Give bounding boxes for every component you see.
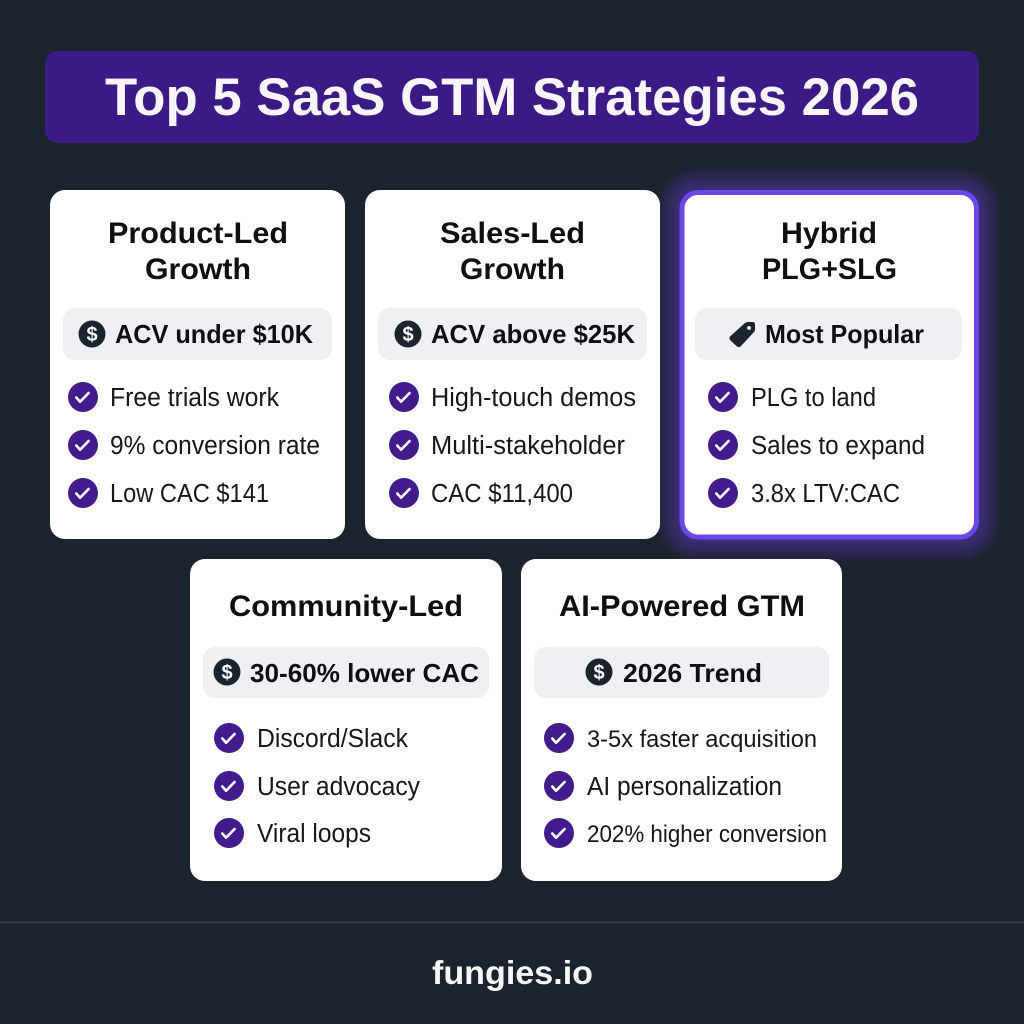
item: Viral loops xyxy=(214,818,371,848)
badge: ACV under $10K xyxy=(63,308,332,360)
item: Low CAC $141 xyxy=(68,478,269,508)
panel: Hybrid PLG+SLG (highlighted) xyxy=(682,192,976,537)
item: 3.8x LTV:CAC xyxy=(708,478,900,508)
title: Top 5 SaaS GTM Strategies 2026 xyxy=(105,68,919,127)
badge: 2026 Trend: 2026 Trend xyxy=(623,658,762,688)
badge: 30-60% lower CAC: $ xyxy=(221,662,233,684)
item: PLG to land: PLG to land xyxy=(751,384,876,412)
item: High-touch demos: High-touch demos xyxy=(431,384,636,412)
heading: Hybrid xyxy=(781,217,877,250)
item: CAC $11,400: CAC $11,400 xyxy=(431,480,573,508)
badge: 2026 Trend xyxy=(534,647,829,698)
item: Free trials work: Free trials work xyxy=(110,384,279,412)
badge: Most Popular xyxy=(695,308,962,360)
item: 3.8x LTV:CAC: 3.8x LTV:CAC xyxy=(751,480,900,508)
heading xyxy=(108,217,288,286)
heading: Product-Led xyxy=(108,217,288,250)
badge: ACV above $25K xyxy=(378,308,647,360)
item: 9% conversion rate: 9% conversion rate xyxy=(110,432,320,460)
badge: 2026 Trend: $ xyxy=(593,662,605,684)
heading xyxy=(762,217,897,286)
icon: price tag xyxy=(729,322,755,347)
heading: AI-Powered GTM xyxy=(559,590,805,623)
badge: ACV above $25K: $ xyxy=(402,324,414,346)
item: 202% higher conversion: 202% higher conversion xyxy=(587,821,827,848)
heading: Growth xyxy=(145,253,251,286)
badge: 30-60% lower CAC xyxy=(203,647,489,698)
item: Viral loops: Viral loops xyxy=(257,820,371,848)
item: Discord/Slack: Discord/Slack xyxy=(257,725,408,753)
title banner xyxy=(45,51,979,143)
heading: Community-Led xyxy=(229,590,463,623)
item: Low CAC $141: Low CAC $141 xyxy=(110,480,269,508)
panel: AI-Powered GTM xyxy=(521,559,842,881)
panel: Sales-Led Growth xyxy=(365,190,660,539)
badge: ACV under $10K: ACV under $10K xyxy=(115,319,313,349)
item: User advocacy: User advocacy xyxy=(257,773,420,801)
heading: Sales-Led xyxy=(440,217,585,250)
badge: 30-60% lower CAC: 30-60% lower CAC xyxy=(250,658,479,688)
panel: Community-Led xyxy=(190,559,502,881)
panel: Product-Led Growth xyxy=(50,190,345,539)
heading: PLG+SLG xyxy=(762,253,897,286)
badge: Most Popular: Most Popular xyxy=(765,319,924,349)
item: Multi-stakeholder: Multi-stakeholder xyxy=(431,432,625,460)
card glow xyxy=(657,168,1001,562)
item: 3-5x faster acquisition: 3-5x faster acquisition xyxy=(587,726,817,753)
item: Sales to expand: Sales to expand xyxy=(751,432,925,460)
badge: ACV above $25K: ACV above $25K xyxy=(431,319,635,349)
footer brand: fungies.io xyxy=(432,954,593,991)
heading: Growth xyxy=(460,253,565,286)
item: PLG to land xyxy=(708,382,876,412)
item: AI personalization: AI personalization xyxy=(587,773,782,801)
heading xyxy=(440,217,585,286)
item: CAC $11,400 xyxy=(389,478,573,508)
badge: ACV under $10K: $ xyxy=(86,324,98,346)
